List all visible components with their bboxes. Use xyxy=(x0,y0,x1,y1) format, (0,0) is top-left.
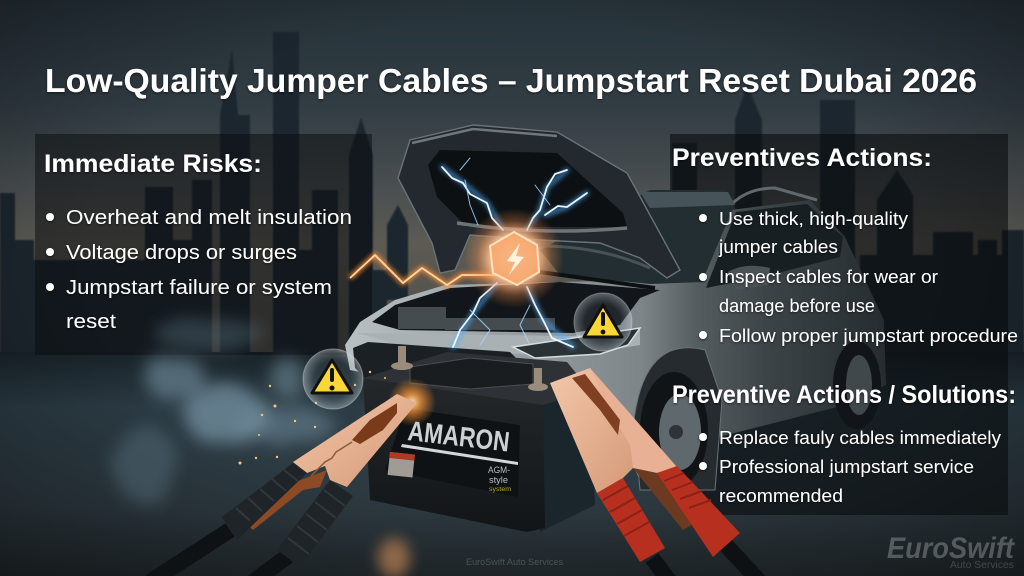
left clamp seam xyxy=(311,442,352,476)
label stripe xyxy=(401,444,518,465)
car battery xyxy=(363,346,595,532)
left black handle lower xyxy=(277,480,353,567)
right clamp cables xyxy=(652,543,760,576)
right clamp inner xyxy=(633,468,700,530)
right red handle left xyxy=(597,478,665,562)
positive terminal xyxy=(391,346,413,370)
solutions list: recommended xyxy=(719,485,843,506)
watermark: logo: Auto Services xyxy=(950,560,1014,571)
car battery: style xyxy=(489,475,508,485)
hood inner liner xyxy=(428,150,627,227)
left clamp jaw teeth xyxy=(352,403,397,444)
hood outer shell xyxy=(398,125,680,278)
floor xyxy=(0,352,1024,576)
floor reflection glow xyxy=(378,538,410,576)
battery right side xyxy=(540,390,595,532)
hexagon bolt badge xyxy=(490,232,539,285)
right clamp teeth xyxy=(572,374,620,435)
right clamp front jaw xyxy=(550,368,633,493)
battery case xyxy=(363,378,545,532)
right clamp back jaw xyxy=(583,368,677,473)
blue lightning bolts xyxy=(442,158,587,347)
rear wheel xyxy=(833,341,881,429)
left clamp inner copper xyxy=(250,470,327,530)
watermark: center: EuroSwift Auto Services xyxy=(466,557,564,567)
heading: immediate risks: Immediate Risks: xyxy=(44,150,262,178)
AMARON brand: AMARON xyxy=(406,415,511,458)
preventive list xyxy=(699,208,1018,346)
preventive list: Follow proper jumpstart procedure xyxy=(719,325,1018,346)
title: Low-Quality Jumper Cables – Jumpstart Reset Dubai 2026 xyxy=(45,62,977,99)
windshield xyxy=(540,190,733,284)
roof rail xyxy=(728,188,817,208)
warning sticker xyxy=(388,452,415,477)
door mirror xyxy=(728,266,770,290)
lightning glyph xyxy=(507,243,524,275)
left text panel backdrop xyxy=(35,134,372,355)
watermark: logo: EuroSwift xyxy=(887,532,1016,565)
engine bay xyxy=(372,282,660,333)
central spark flare xyxy=(464,208,564,308)
open car hood xyxy=(398,125,680,278)
solutions list xyxy=(699,427,1002,506)
risk list: Voltage drops or surges xyxy=(66,242,297,264)
smoke cloud xyxy=(113,319,335,503)
orange jagged arc xyxy=(350,255,500,285)
left black handle upper xyxy=(222,463,307,540)
car body xyxy=(345,200,886,480)
right red handle right xyxy=(657,466,740,557)
risk list: Overheat and melt insulation xyxy=(66,207,352,229)
right text panel backdrop xyxy=(670,134,1008,515)
solutions list: Professional jumpstart service xyxy=(719,456,974,477)
sparks at clamp xyxy=(238,371,436,464)
front bumper and grille xyxy=(353,342,520,378)
risk list: reset xyxy=(66,311,116,333)
right jumper clamp xyxy=(550,368,760,576)
headlight xyxy=(513,328,640,358)
left clamp wedge xyxy=(293,394,417,487)
hood rim stripe xyxy=(412,129,557,143)
warning icon: engine xyxy=(574,293,632,351)
battery label panel xyxy=(385,408,520,497)
preventive list: jumper cables xyxy=(718,236,838,257)
car battery: system xyxy=(489,487,511,493)
solutions list: Replace fauly cables immediately xyxy=(719,427,1002,448)
risk list: Jumpstart failure or system xyxy=(66,277,332,299)
preventive list: Use thick, high-quality xyxy=(719,208,909,229)
AGM text: AGM- xyxy=(488,465,510,475)
fender stripe xyxy=(357,328,640,356)
front wheel xyxy=(634,348,722,490)
panel: immediate risks xyxy=(44,150,352,333)
preventive list: damage before use xyxy=(719,295,875,316)
panel: preventives actions xyxy=(672,144,1018,346)
engine parts xyxy=(398,307,555,330)
battery top xyxy=(363,352,590,405)
left jumper clamp xyxy=(150,394,417,576)
preventive list: Inspect cables for wear or xyxy=(719,266,938,287)
battery cell cover xyxy=(410,358,533,389)
negative terminal xyxy=(528,368,548,391)
car xyxy=(345,188,886,490)
hood lower rib xyxy=(457,223,627,231)
wiper xyxy=(540,272,655,288)
warning icon: battery clamp xyxy=(303,349,363,409)
heading: preventives actions: Preventives Actions: xyxy=(672,144,932,172)
roof edge xyxy=(640,192,735,208)
risk list xyxy=(46,207,352,333)
side windows xyxy=(706,204,843,288)
left clamp cables xyxy=(150,530,288,576)
panel: solutions xyxy=(672,381,1016,506)
city skyline silhouette xyxy=(0,32,1024,370)
